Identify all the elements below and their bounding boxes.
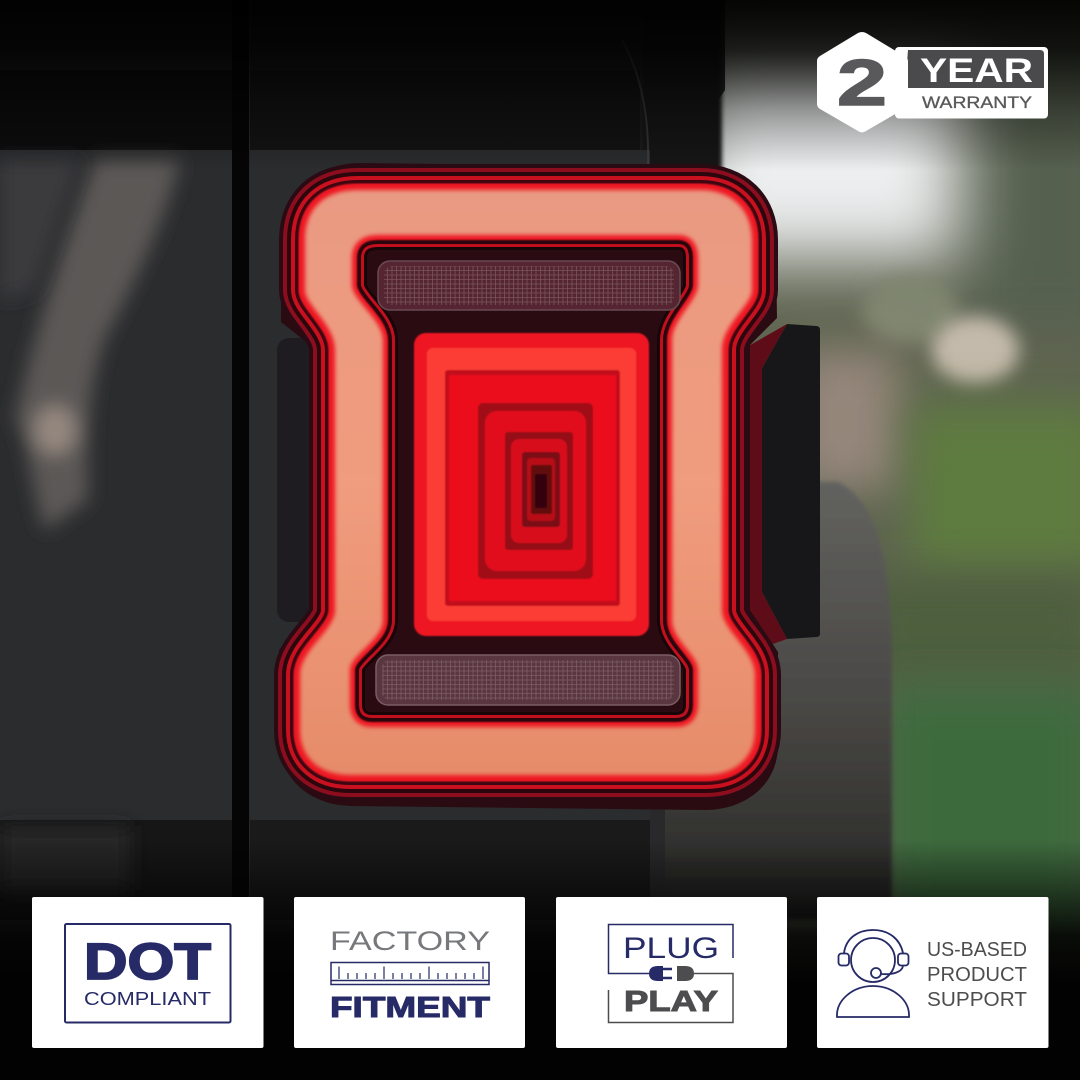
support agent icon: [837, 930, 909, 1017]
warranty label: WARRANTY: [922, 94, 1032, 112]
door reflection: [0, 160, 180, 890]
blurred wheel and bumper: [660, 482, 892, 920]
lamp housing: [278, 163, 778, 810]
plug label: PLUG: [623, 932, 719, 965]
card: plug and play: [556, 897, 787, 1048]
card: factory fitment: [294, 897, 525, 1048]
support text: US-BASED: [927, 939, 1027, 961]
vehicle body: [0, 0, 725, 1080]
red wedge by right cap: [745, 324, 787, 645]
fitment heading: FITMENT: [330, 992, 490, 1024]
centre brake lens: [414, 333, 649, 636]
year label: YEAR: [920, 52, 1033, 90]
left side cap: [277, 338, 311, 622]
compliant label: COMPLIANT: [84, 989, 211, 1009]
right side cap: [762, 324, 820, 639]
card: product support: [817, 897, 1048, 1048]
support text: [927, 939, 1027, 1011]
upper reverse lamp strip: [378, 261, 680, 310]
plug icon: [649, 966, 694, 981]
glowing peach light ring: [300, 190, 755, 775]
lower reverse lamp strip: [376, 655, 680, 705]
ruler icon: [331, 962, 489, 984]
hexagon: [817, 32, 908, 132]
lens contour rings: [300, 190, 755, 775]
warranty badge: [817, 32, 1048, 132]
grey wire: [608, 974, 733, 1022]
support text: PRODUCT: [927, 964, 1027, 986]
bottom fade: [0, 840, 1080, 1080]
warranty label frame: [895, 47, 1048, 118]
DOT frame: [65, 924, 230, 1022]
factory label: FACTORY: [330, 926, 490, 956]
support text: SUPPORT: [927, 989, 1027, 1011]
play heading: PLAY: [624, 986, 718, 1018]
DOT heading: DOT: [84, 933, 211, 990]
top fade: [0, 0, 1080, 170]
blurred sky and foliage: [690, 60, 1080, 945]
inner window: [350, 235, 698, 727]
numeral 2: 2: [837, 46, 887, 119]
navy wire: [608, 924, 733, 974]
card: DOT compliant: [32, 897, 264, 1048]
tail light: [277, 163, 820, 810]
